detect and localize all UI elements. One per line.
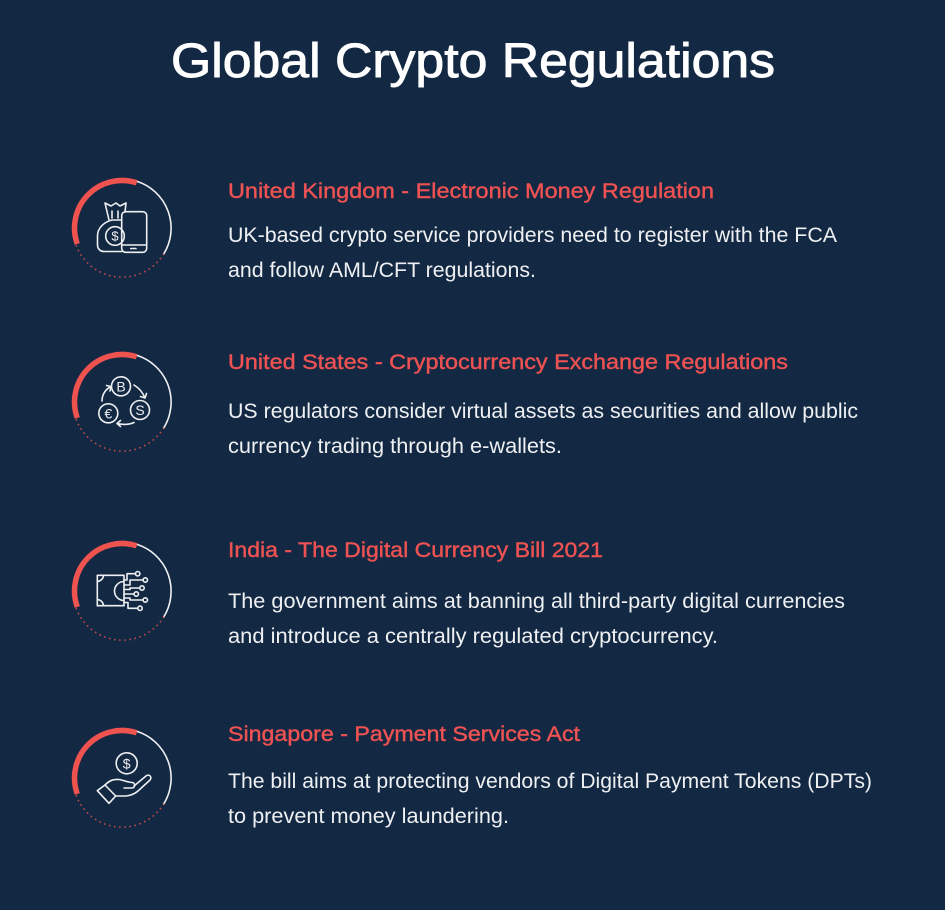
ring and icon: currency exchange: S [135, 402, 145, 418]
ring and icon: hand holding coin: $ [123, 755, 131, 771]
body text [228, 400, 858, 458]
title: Global Crypto Regulations [171, 35, 775, 88]
ring and icon: currency exchange: B [116, 378, 126, 394]
panel: Singapore [75, 723, 872, 828]
ring and icon: digital banknote circuit [75, 543, 171, 640]
heading: India - The Digital Currency Bill 2021 [228, 539, 603, 562]
heading: United Kingdom - Electronic Money Regulation [228, 180, 714, 203]
body text: to prevent money laundering. [228, 805, 509, 828]
body text: currency trading through e-wallets. [228, 435, 562, 458]
body text: US regulators consider virtual assets as securities and allow public [228, 400, 858, 423]
heading: Singapore - Payment Services Act [228, 723, 580, 746]
body text [228, 224, 837, 282]
panel: India [75, 539, 845, 648]
heading: United States - Cryptocurrency Exchange Regulations [228, 351, 788, 374]
ring and icon: hand holding coin [75, 730, 171, 827]
body text: UK-based crypto service providers need to register with the FCA [228, 224, 837, 247]
body text: The bill aims at protecting vendors of Digital Payment Tokens (DPTs) [228, 770, 872, 793]
body text: and introduce a centrally regulated cryptocurrency. [228, 625, 718, 648]
ring and icon: currency exchange: € [104, 405, 112, 421]
ring and icon: money bag and phone [75, 180, 171, 277]
panel: United Kingdom [75, 180, 837, 282]
ring and icon: money bag and phone: $ [111, 228, 119, 244]
body text [228, 590, 845, 648]
body text: and follow AML/CFT regulations. [228, 259, 536, 282]
ring and icon: currency exchange [75, 354, 171, 451]
body text [228, 770, 872, 828]
panel: United States [75, 351, 858, 458]
body text: The government aims at banning all third-party digital currencies [228, 590, 845, 613]
